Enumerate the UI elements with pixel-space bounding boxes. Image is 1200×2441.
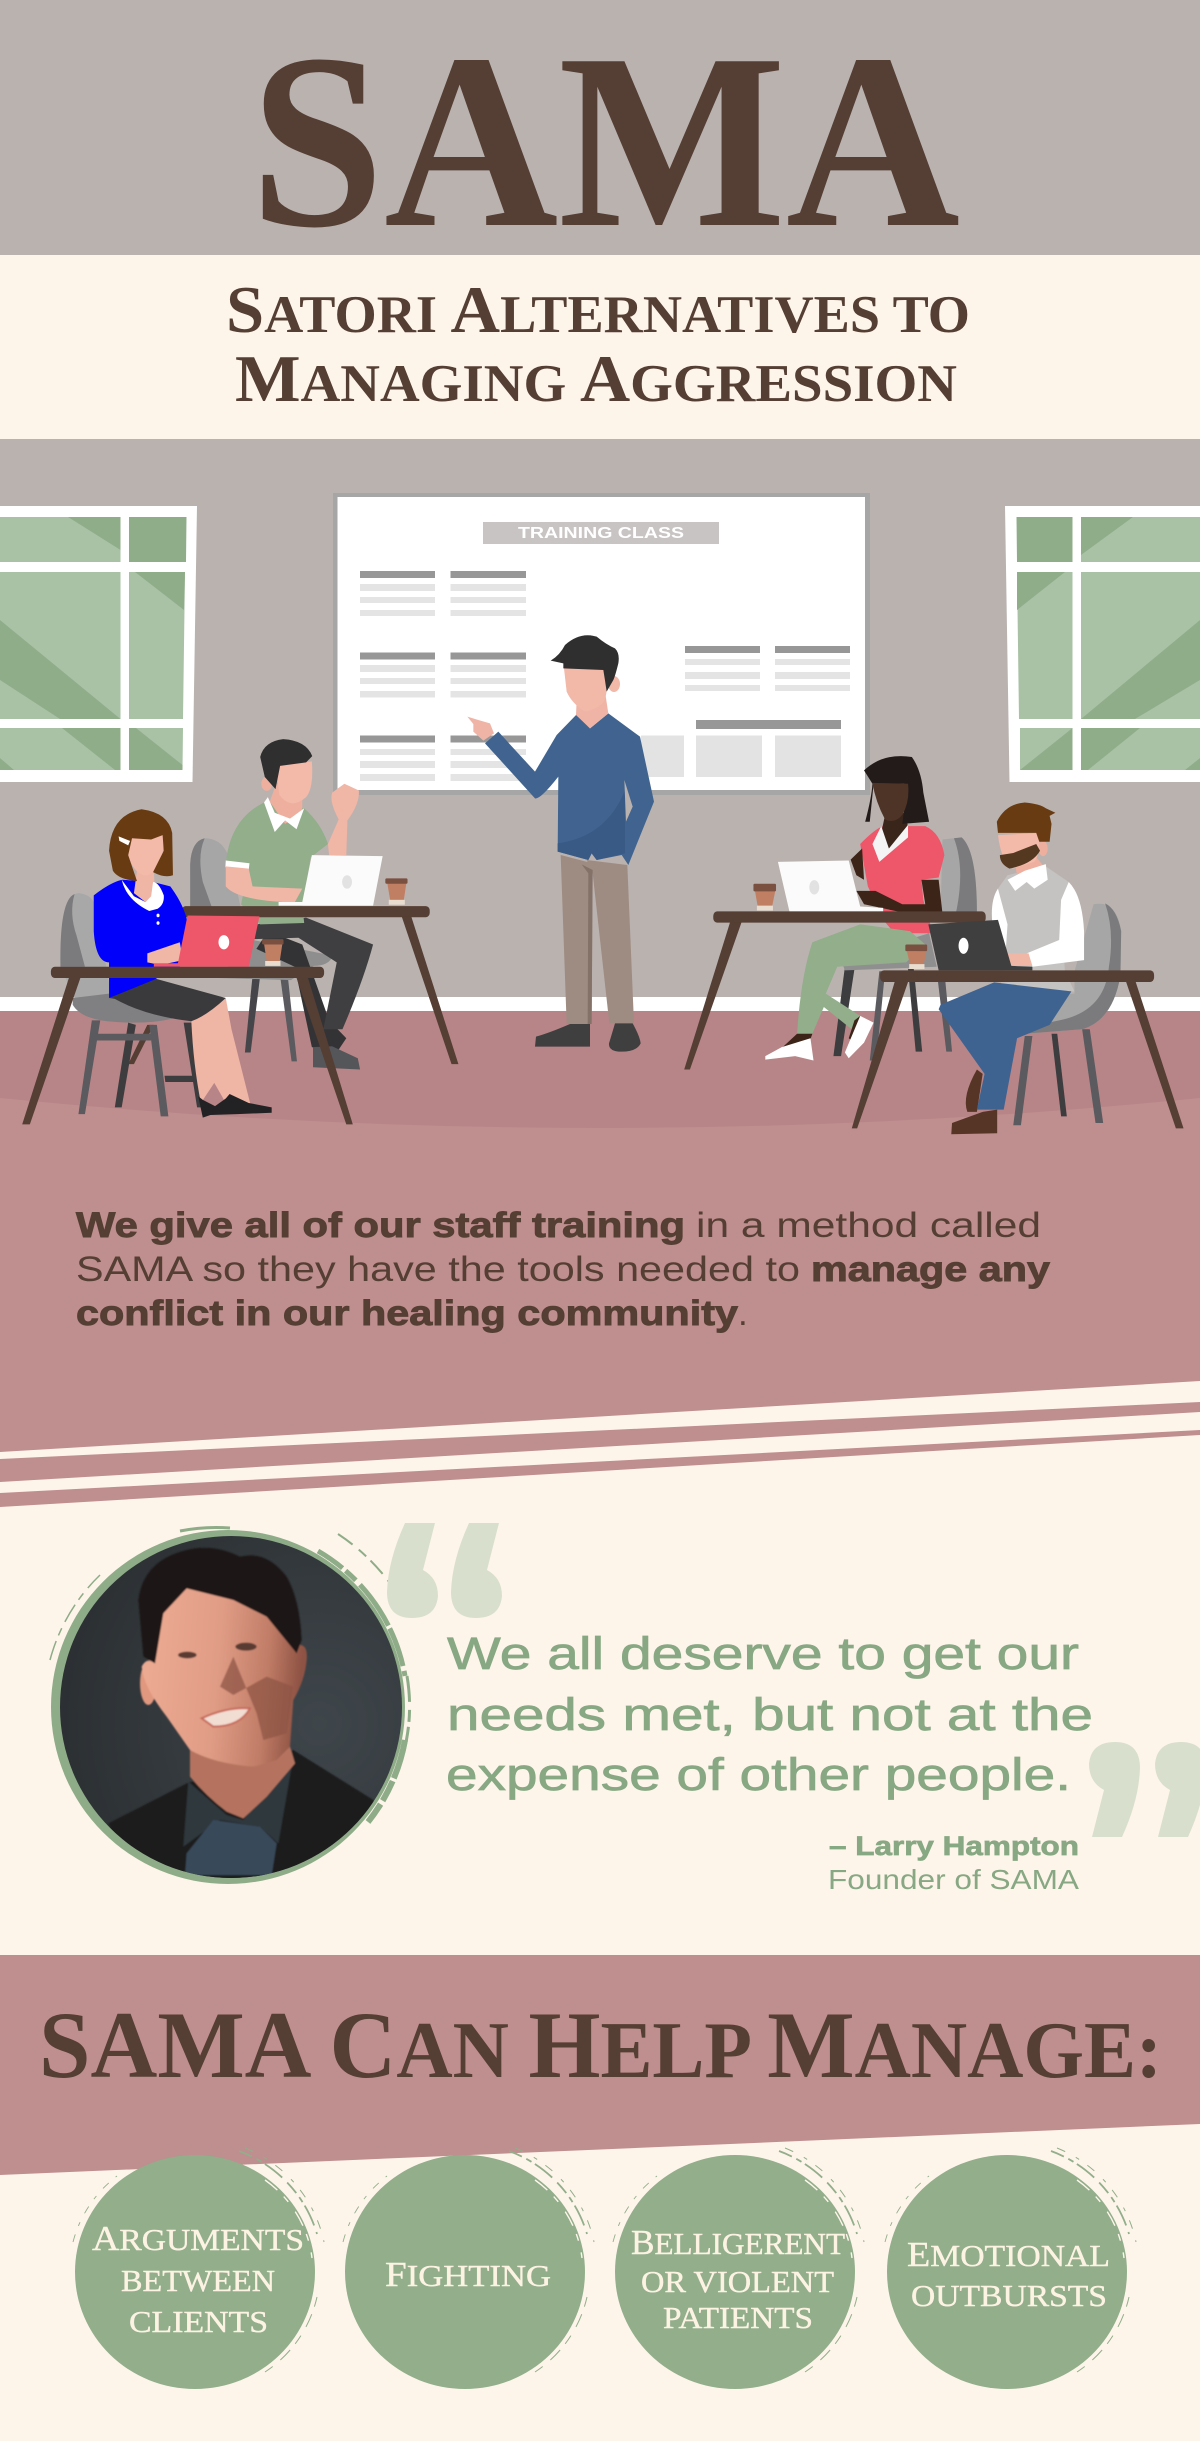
subtitle band <box>0 255 1200 439</box>
circle: fighting <box>343 2148 594 2389</box>
floor <box>0 1011 1200 1511</box>
woman's ankles <box>782 1016 864 1048</box>
portrait of Larry Hampton <box>50 1527 410 1884</box>
white laptop <box>778 861 883 911</box>
man's neck <box>1015 857 1046 880</box>
woman's trousers <box>797 924 925 1034</box>
woman's back hair <box>864 756 929 824</box>
logo on white laptop <box>809 880 819 894</box>
man's collar <box>264 797 304 832</box>
left window <box>0 506 197 782</box>
circle: emotional outbursts: OUTBURSTS <box>911 2278 1107 2313</box>
presenter's face <box>564 668 607 712</box>
woman's hair <box>109 809 173 881</box>
panel: founder quote <box>50 1523 1200 1895</box>
man's ear <box>1039 841 1048 856</box>
circle: belligerent or violent patients: OR VIOLENT <box>641 2264 834 2299</box>
front table <box>852 970 1184 1128</box>
attribution: Founder of SAMA <box>828 1864 1079 1895</box>
closing quote mark <box>1089 1742 1200 1837</box>
shirt <box>183 1769 292 1846</box>
whiteboard <box>333 493 870 795</box>
tie <box>185 1820 277 1875</box>
panel: staff training statement: . <box>738 1294 748 1333</box>
man's jeans <box>939 982 1071 1110</box>
board text lines right <box>685 646 850 691</box>
panel: staff training statement <box>76 1206 1051 1333</box>
woman's shirt <box>860 826 944 933</box>
man's shoe, front <box>951 1110 997 1134</box>
logo on dark laptop <box>959 938 968 954</box>
man's hair <box>260 739 312 789</box>
man's chair <box>190 838 333 1061</box>
coffee cup <box>753 884 776 911</box>
presenter's ear <box>608 676 620 692</box>
front table <box>22 967 353 1124</box>
woman's face <box>872 783 908 821</box>
right window <box>1005 506 1200 782</box>
circle: belligerent or violent patients: BELLIGERENT <box>631 2223 845 2262</box>
title: SAMA: SAMA <box>250 3 960 280</box>
man's shoe <box>313 1046 360 1069</box>
panel: training room scene <box>0 439 1200 1511</box>
quote text: needs met, but not at the <box>447 1689 1093 1740</box>
mouth <box>202 1708 250 1727</box>
circle: emotional outbursts: EMOTIONAL <box>907 2235 1110 2274</box>
board chart blocks <box>641 720 841 777</box>
presenter's trousers <box>561 855 634 1024</box>
photo <box>55 1530 407 1882</box>
man's pants <box>254 918 373 1053</box>
left table group: man and woman <box>22 739 458 1124</box>
title band <box>0 0 1200 280</box>
circle: emotional outbursts <box>885 2148 1136 2389</box>
panel: SAMA can help manage <box>0 1955 1200 2389</box>
quote text <box>446 1628 1093 1800</box>
presenter's pointing hand <box>467 717 494 741</box>
woman's neck <box>881 813 908 853</box>
presenter's shirt <box>485 713 654 865</box>
presenter's hair <box>551 635 619 692</box>
woman's legs <box>191 998 251 1105</box>
wall <box>0 439 1200 999</box>
man's hand <box>1008 953 1032 966</box>
woman's blouse buttons <box>157 914 160 925</box>
woman's chair <box>60 893 203 1116</box>
circle: arguments between clients <box>73 2148 324 2389</box>
woman's shoes <box>198 1094 272 1118</box>
hair <box>138 1548 302 1663</box>
back table <box>684 911 986 1069</box>
woman's hair clip <box>119 836 130 845</box>
man's beard <box>1000 844 1040 869</box>
coffee cup <box>905 944 927 969</box>
back table <box>128 906 458 1064</box>
presenter's neck <box>576 692 608 728</box>
jacket <box>108 1750 374 1880</box>
presenter <box>467 635 654 1052</box>
red laptop <box>154 915 259 967</box>
eyes <box>178 1643 257 1658</box>
man's hair <box>997 803 1055 842</box>
face shadow <box>220 1657 293 1740</box>
logo on white laptop <box>342 875 352 889</box>
man's sleeve cuff <box>225 861 249 870</box>
dark laptop <box>928 920 1032 970</box>
man's neck <box>270 784 302 824</box>
woman's skirt <box>109 978 226 1021</box>
panel: staff training statement: conflict in our healing community <box>76 1294 739 1333</box>
woman's collar <box>122 880 164 911</box>
panel: staff training statement: SAMA so they have the tools needed to <box>76 1250 800 1289</box>
section heading: SAMA CAN HELP MANAGE: <box>39 1992 1162 2098</box>
woman's hands <box>147 942 183 965</box>
circle: arguments between clients: CLIENTS <box>129 2304 268 2339</box>
opening quote mark <box>387 1523 502 1618</box>
presenter's shoes <box>535 1023 641 1052</box>
woman's chair <box>833 837 977 1061</box>
woman's white shoes <box>765 1016 874 1061</box>
board heading <box>483 522 719 544</box>
board text lines left <box>360 571 526 781</box>
quote text: We all deserve to get our <box>447 1628 1079 1679</box>
woman's arms <box>851 848 942 918</box>
man's collar <box>1008 864 1048 891</box>
woman's face <box>128 833 163 875</box>
man's face <box>276 761 312 803</box>
coffee cup <box>385 878 408 905</box>
logo on red laptop <box>218 935 229 949</box>
neck <box>190 1747 295 1818</box>
man's face <box>998 833 1040 869</box>
man's sweater vest <box>998 866 1074 998</box>
woman's blouse <box>94 880 187 998</box>
subtitle line 2: MANAGING AGGRESSION <box>235 342 957 416</box>
man's chair <box>975 903 1121 1125</box>
panel: staff training statement: in a method called <box>696 1206 1041 1245</box>
circle: arguments between clients: ARGUMENTS <box>92 2219 304 2258</box>
white laptop <box>279 855 383 906</box>
right table group: woman and man <box>684 756 1184 1134</box>
circle: arguments between clients: BETWEEN <box>121 2263 275 2298</box>
baseboard <box>0 997 1200 1011</box>
attribution <box>828 1831 1079 1895</box>
quote text: expense of other people. <box>446 1749 1071 1800</box>
board heading: TRAINING CLASS <box>518 525 684 542</box>
diagonal stripes divider <box>0 1381 1200 1960</box>
circle: belligerent or violent patients <box>613 2148 864 2389</box>
circle: fighting: FIGHTING <box>385 2255 551 2294</box>
man's ear <box>261 777 272 791</box>
circle: belligerent or violent patients: PATIENTS <box>663 2300 813 2335</box>
subtitle line 1: SATORI ALTERNATIVES TO <box>226 273 970 347</box>
man's arms <box>226 784 359 903</box>
man's shirt <box>226 803 328 924</box>
ear <box>140 1662 157 1705</box>
man's shoe, back <box>966 1069 983 1112</box>
shirt shadow <box>558 790 625 860</box>
face <box>142 1587 307 1767</box>
woman's neck <box>134 871 155 902</box>
coffee cup <box>262 939 284 966</box>
man's sleeves <box>992 882 1084 967</box>
brush ring <box>50 1527 410 1884</box>
gap between arm and torso <box>624 780 633 822</box>
woman's collar <box>872 825 908 862</box>
panel: staff training statement: We give all of our staff training <box>76 1206 685 1245</box>
attribution: – Larry Hampton <box>829 1831 1079 1861</box>
panel: staff training statement: manage any <box>811 1250 1051 1289</box>
